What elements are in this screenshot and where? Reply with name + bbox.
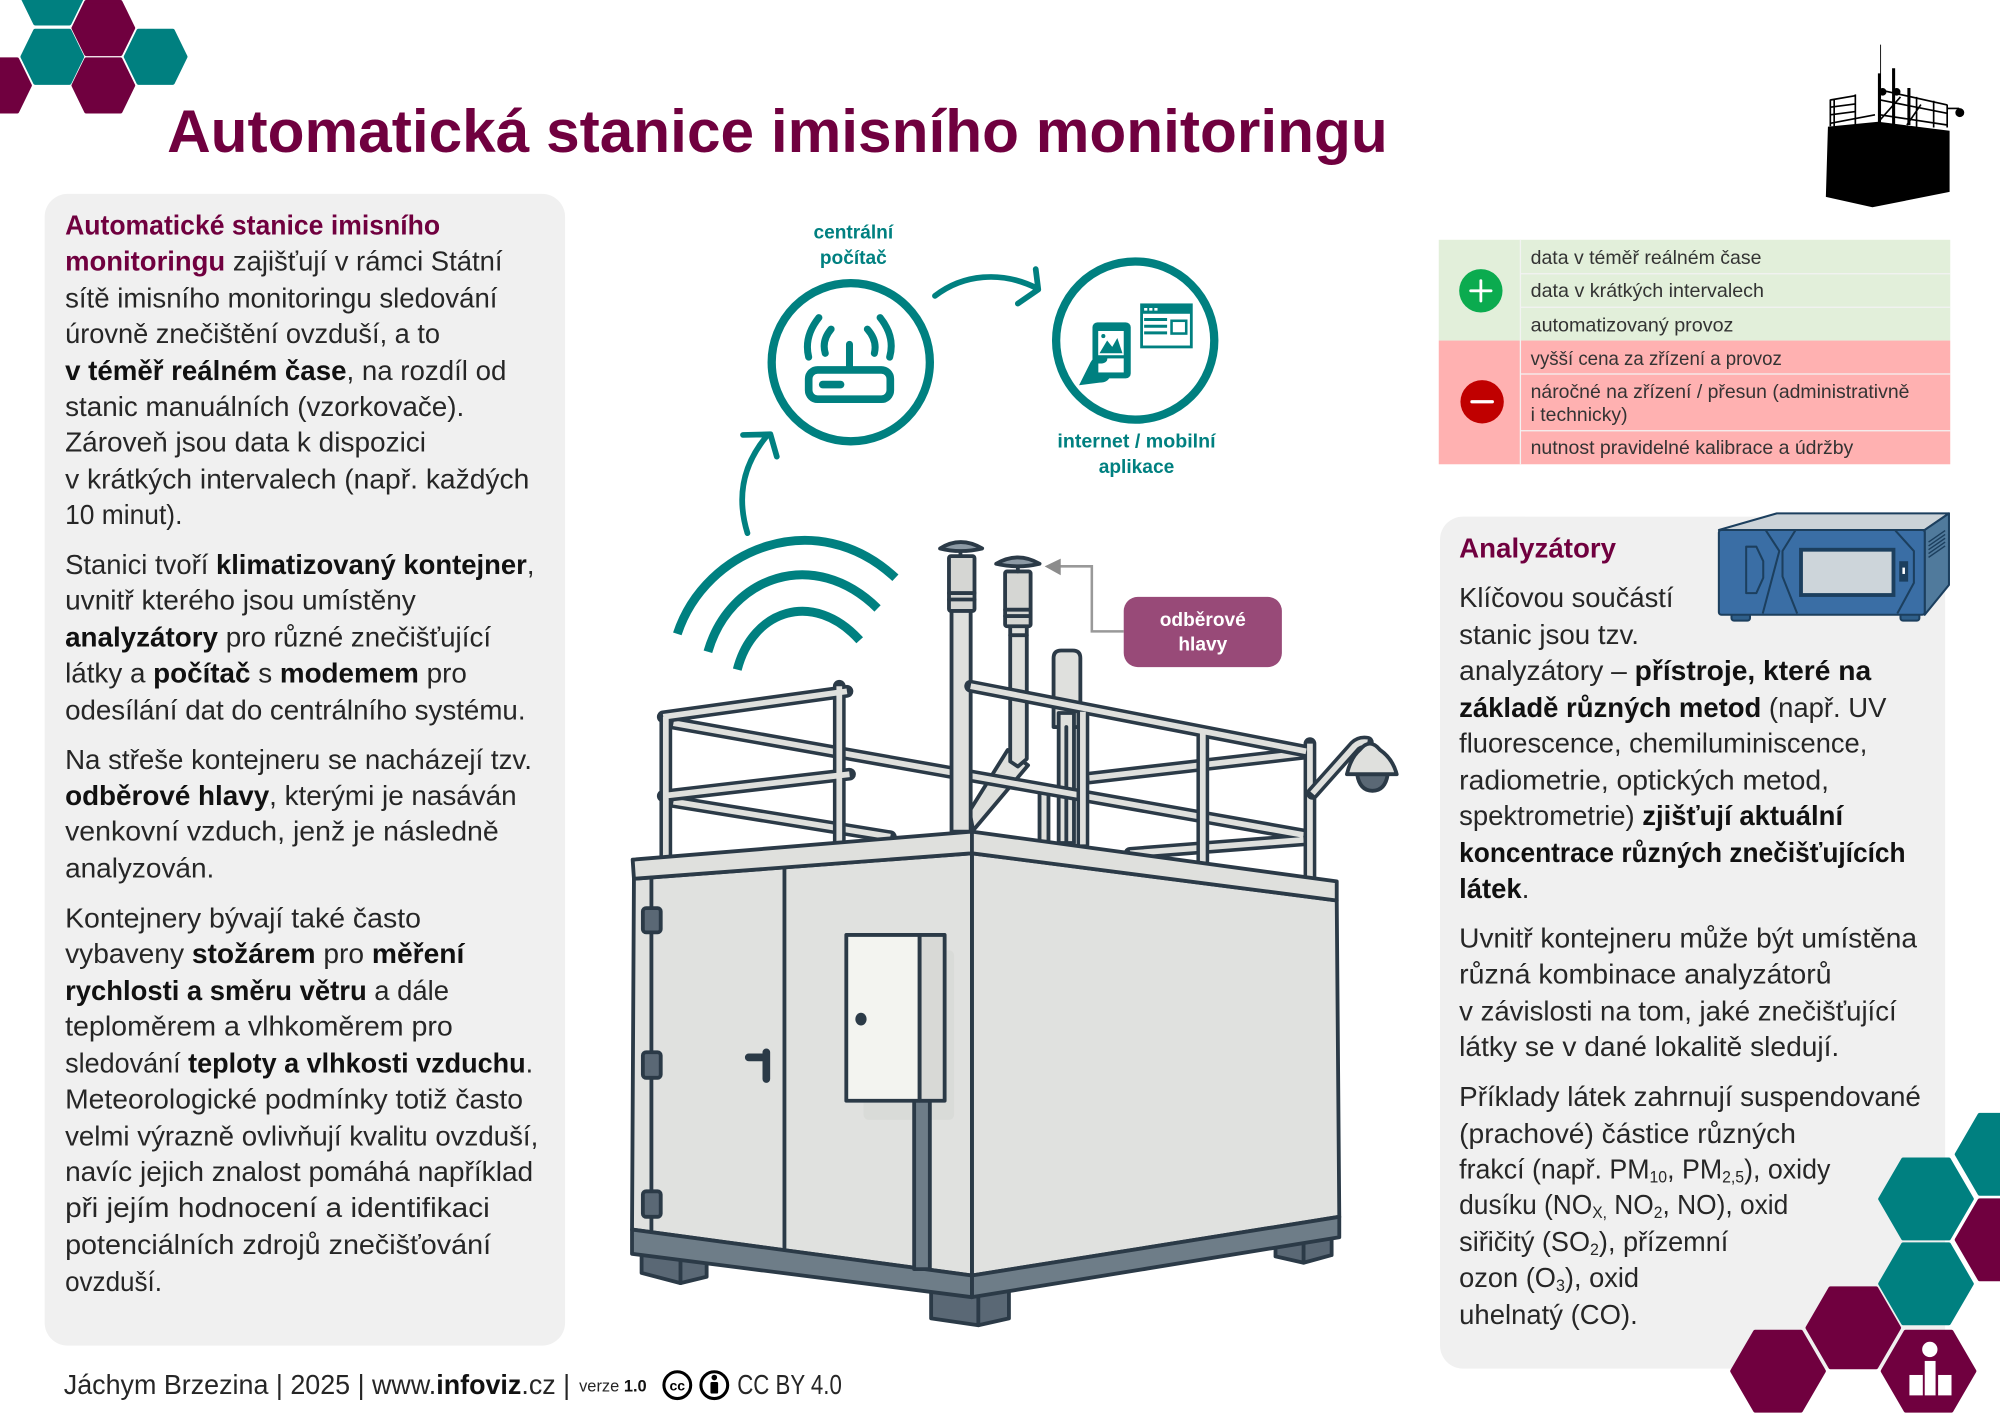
text block: analyzers: uhelnatý (CO).: [1459, 1299, 1638, 1330]
table: pros and cons: data v krátkých intervalech: [1531, 281, 1764, 302]
text block: analyzers: ), oxidy: [1744, 1154, 1830, 1185]
sampling head: short, with bend: [969, 557, 1040, 830]
text block: analyzers: ozon (O: [1459, 1262, 1559, 1293]
heading: analyzers: Analyzátory: [1459, 532, 1616, 563]
text block: intro paragraphs: monitoringu zajišťují v rámci Státní: [65, 245, 503, 276]
text block: analyzers: analyzátory – přístroje, které na: [1459, 655, 1872, 686]
text block: intro paragraphs: 10 minut).: [65, 499, 182, 530]
footer: credits: verze 1.0: [579, 1377, 647, 1396]
text block: analyzers: v závislosti na tom, jaké znečišťující: [1459, 995, 1897, 1026]
icon: plus: [1459, 269, 1503, 312]
table: pros and cons: náročné na zřízení / přesun (administrativně: [1531, 382, 1909, 403]
text block: analyzers: 2: [1654, 1203, 1662, 1222]
text block: intro paragraphs: v téměř reálném čase, na rozdíl od: [65, 355, 506, 386]
text block: intro paragraphs: Kontejnery bývají také často: [65, 902, 421, 933]
table: pros and cons: automatizovaný provoz: [1531, 316, 1733, 337]
callout: sampling heads: hlavy: [1178, 634, 1228, 655]
footer: credits: CC BY 4.0: [737, 1369, 842, 1400]
text block: analyzers: stanic jsou tzv.: [1459, 619, 1639, 650]
text block: intro paragraphs: stanic manuálních (vzorkovače).: [65, 391, 464, 422]
text block: intro paragraphs: Stanici tvoří klimatizovaný kontejner,: [65, 549, 534, 580]
text block: intro paragraphs: [65, 210, 538, 1297]
container walls: [632, 853, 1339, 1275]
dome camera: [1312, 742, 1397, 793]
panel: analyzers: [1440, 517, 1945, 1369]
footer: credits: Jáchym Brzezina | 2025 | www.infoviz.cz |: [64, 1369, 570, 1400]
text block: analyzers: látky se v dané lokalitě sledují.: [1459, 1031, 1839, 1062]
text block: intro paragraphs: navíc jejich znalost pomáhá například: [65, 1156, 533, 1187]
icon: creative commons: cc: [670, 1377, 685, 1393]
feet: [642, 1237, 1332, 1325]
text block: analyzers: Příklady látek zahrnují suspendované: [1459, 1081, 1921, 1112]
text block: intro paragraphs: venkovní vzduch, jenž je následně: [65, 816, 499, 847]
label: internet and mobile app: aplikace: [1099, 457, 1174, 478]
text block: analyzers: siřičitý (SO: [1459, 1226, 1595, 1257]
illustration: monitoring container: [632, 542, 1397, 1325]
text block: analyzers: 2,5: [1722, 1167, 1744, 1186]
corner line: [970, 853, 973, 1297]
text block: intro paragraphs: při jejím hodnocení a identifikaci: [65, 1192, 490, 1223]
text block: analyzers: X,: [1592, 1203, 1607, 1222]
silhouette icon: station: [1827, 45, 1964, 207]
text block: analyzers: radiometrie, optických metod,: [1459, 765, 1829, 796]
table: pros and cons: [1439, 240, 1950, 464]
text block: analyzers: základě různých metod (např. UV: [1459, 692, 1887, 723]
label: internet and mobile app: [1057, 432, 1216, 478]
back railing: [673, 723, 1304, 853]
text block: intro paragraphs: Meteorologické podmínky totiž často: [65, 1083, 523, 1114]
icon: analyzer device: [1719, 513, 1949, 621]
text block: intro paragraphs: ovzduší.: [65, 1266, 162, 1297]
arrow: central computer to internet: [935, 269, 1038, 304]
icon: router in circle: [772, 283, 930, 441]
callout: sampling heads: [1045, 559, 1282, 667]
text block: intro paragraphs: sítě imisního monitoringu sledování: [65, 282, 498, 313]
arrow: station to central computer: [742, 434, 777, 533]
text block: intro paragraphs: potenciálních zdrojů znečišťování: [65, 1229, 491, 1260]
label: central computer: počítač: [820, 248, 887, 269]
text block: intro paragraphs: odběrové hlavy, kterými je nasáván: [65, 780, 517, 811]
text block: analyzers: , PM: [1667, 1154, 1722, 1185]
hexagon decoration: top left: [0, 0, 186, 112]
label: central computer: centrální: [813, 223, 894, 244]
text block: intro paragraphs: sledování teploty a vlhkosti vzduchu.: [65, 1048, 533, 1079]
text block: intro paragraphs: uvnitř kterého jsou umístěny: [65, 585, 416, 616]
text block: intro paragraphs: vybaveny stožárem pro měření: [65, 938, 465, 969]
icon: wireless signal: [677, 540, 895, 670]
callout: sampling heads: odběrové: [1160, 610, 1246, 631]
text block: intro paragraphs: Zároveň jsou data k dispozici: [65, 427, 426, 458]
text block: intro paragraphs: úrovně znečištění ovzduší, a to: [65, 318, 440, 349]
table: pros and cons: i technicky): [1531, 405, 1628, 426]
text block: analyzers: NO: [1607, 1189, 1654, 1220]
icon: infoviz logo: [1909, 1342, 1952, 1395]
text block: intro paragraphs: analyzátory pro různé znečišťující: [65, 622, 491, 653]
sampling head: tall: [940, 542, 982, 832]
icon: creative commons: [664, 1372, 728, 1399]
text block: analyzers: Klíčovou součástí: [1459, 582, 1674, 613]
icon: minus: [1460, 380, 1504, 423]
text block: analyzers: 2: [1590, 1240, 1599, 1259]
text block: analyzers: ), oxid: [1565, 1262, 1639, 1293]
electrical box: [846, 935, 954, 1269]
text block: analyzers: [1459, 532, 1921, 1330]
text block: analyzers: frakcí (např. PM: [1459, 1154, 1659, 1185]
text block: analyzers: dusíku (NO: [1459, 1189, 1601, 1220]
text block: analyzers: (prachové) částice různých: [1459, 1118, 1796, 1149]
label: central computer: [813, 223, 894, 269]
base frame: [632, 1217, 1339, 1297]
text block: intro paragraphs: v krátkých intervalech (např. každých: [65, 464, 529, 495]
text block: intro paragraphs: Na střeše kontejneru se nacházejí tzv.: [65, 744, 532, 775]
text block: analyzers: 3: [1556, 1276, 1565, 1295]
table: pros and cons: vyšší cena za zřízení a provoz: [1531, 349, 1782, 370]
hexagon decoration: bottom right: [1732, 1115, 2000, 1411]
text block: analyzers: látek.: [1459, 873, 1529, 904]
text block: intro paragraphs: velmi výrazně ovlivňují kvalitu ovzduší,: [65, 1120, 538, 1151]
text block: analyzers: , NO), oxid: [1662, 1189, 1788, 1220]
label: internet and mobile app: internet / mobilní: [1057, 432, 1216, 453]
text block: intro paragraphs: teploměrem a vlhkoměrem pro: [65, 1011, 453, 1042]
icon: internet and mobile app in circle: [1056, 261, 1214, 420]
text block: analyzers: koncentrace různých znečišťujících: [1459, 837, 1906, 868]
text block: analyzers: Uvnitř kontejneru může být umístěna: [1459, 923, 1917, 954]
table: pros and cons: nutnost pravidelné kalibrace a údržby: [1531, 438, 1854, 459]
text block: intro paragraphs: látky a počítač s modemem pro: [65, 657, 467, 688]
front railing: [663, 686, 1310, 878]
text block: intro paragraphs: rychlosti a směru větru a dále: [65, 975, 449, 1006]
text block: analyzers: 10: [1649, 1167, 1667, 1186]
text block: analyzers: různá kombinace analyzátorů: [1459, 958, 1832, 989]
text block: intro paragraphs: analyzován.: [65, 853, 214, 884]
title: Automatická stanice imisního monitoringu: [167, 98, 1388, 165]
panel: intro text: [45, 194, 565, 1346]
roof band: [633, 832, 1337, 900]
text block: analyzers: fluorescence, chemiluminiscence,: [1459, 728, 1867, 759]
text block: analyzers: ), přízemní: [1599, 1226, 1729, 1257]
door: [643, 869, 784, 1249]
table: pros and cons: data v téměř reálném čase: [1531, 248, 1761, 269]
footer: credits: [64, 1369, 842, 1400]
text block: intro paragraphs: Automatické stanice imisního: [65, 210, 440, 241]
pipes and sampling stub: [1040, 650, 1080, 843]
text block: analyzers: spektrometrie) zjišťují aktuální: [1459, 800, 1844, 831]
text block: intro paragraphs: odesílání dat do centrálního systému.: [65, 694, 526, 725]
